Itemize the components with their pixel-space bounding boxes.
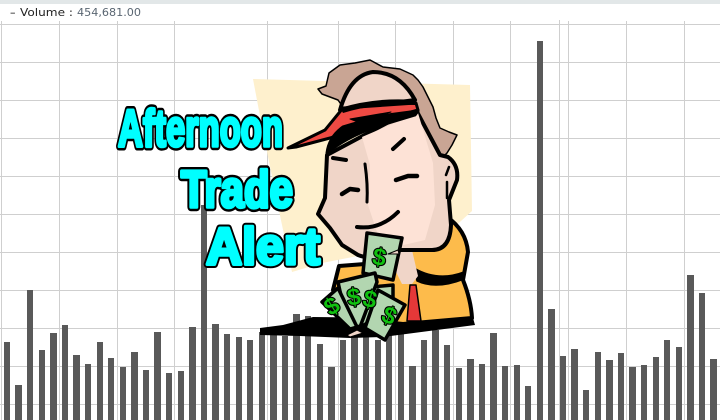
legend: volume readout: – [10, 6, 16, 19]
collar band [414, 268, 464, 285]
head: face [318, 108, 457, 258]
body: yellow jacket [333, 217, 472, 324]
title line: Afternoon: Afternoon [118, 100, 283, 158]
dollar signs: $ [377, 301, 401, 331]
cap band top [340, 99, 415, 113]
legend: volume readout: 454,681.00 [77, 6, 141, 19]
title line: Alert: Alert [206, 218, 320, 276]
dollar signs: $ [360, 285, 380, 315]
tie [407, 285, 421, 321]
title line: Afternoon: Afternoon [118, 100, 283, 158]
nose line [365, 164, 367, 202]
dollar signs: $ [345, 283, 363, 312]
cap brim shadow [327, 111, 418, 153]
head: dome [340, 72, 415, 110]
hair [318, 60, 457, 160]
head: face highlight [362, 113, 435, 247]
panel: beige backdrop [253, 79, 472, 272]
hand [347, 330, 363, 337]
title line: Afternoon [118, 100, 283, 158]
title line: Trade: Trade [181, 161, 293, 219]
fan of dollar bills [322, 233, 405, 340]
smile [357, 212, 398, 227]
title line: Trade: Trade [181, 161, 293, 219]
table shadow [260, 317, 475, 338]
bill left [322, 288, 357, 329]
legend: volume readout [10, 6, 141, 19]
dollar signs: $ [319, 291, 345, 322]
dollar signs [319, 243, 401, 331]
legend: volume readout: Volume : [20, 6, 73, 19]
title line: Alert: Alert [206, 218, 320, 276]
neck [395, 248, 418, 284]
dollar signs: $ [370, 243, 389, 272]
bill middle [360, 285, 393, 327]
cap stripe [350, 112, 391, 122]
illustration: trader with money [260, 60, 475, 340]
eyes and brows [333, 139, 417, 227]
cap visor red [288, 103, 418, 148]
bill top [363, 233, 402, 280]
bill front [365, 290, 405, 340]
bill back left [338, 273, 377, 327]
ear detail [446, 167, 449, 198]
title: Afternoon Trade Alert [118, 100, 320, 276]
